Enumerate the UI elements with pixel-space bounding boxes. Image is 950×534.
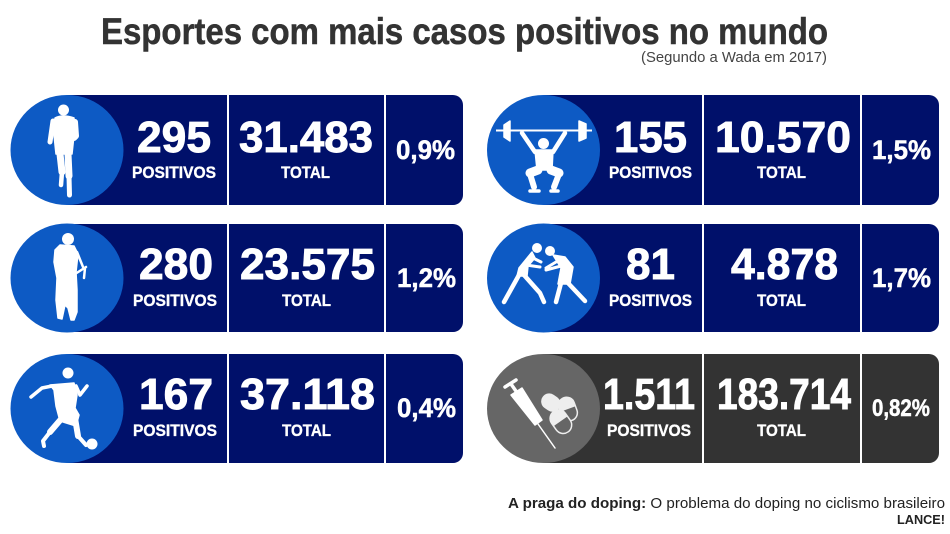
panel: wrestling: [487, 224, 939, 332]
label: positivos: POSITIVOS: [607, 422, 691, 440]
value: percent: 1,5%: [872, 135, 931, 165]
source credit: A praga do doping: O problema do doping no ciclismo brasileiro: [508, 495, 945, 512]
value: positivos: 167: [139, 370, 213, 419]
label: positivos: POSITIVOS: [133, 292, 217, 310]
icon: football player: [31, 368, 98, 450]
panel: cycling: [10, 224, 463, 332]
value: percent: 0,4%: [397, 393, 456, 423]
icon: weightlifter: [496, 121, 592, 191]
panel: football: [10, 354, 463, 463]
value: total: 10.570: [715, 113, 851, 162]
value: percent: 0,82%: [872, 395, 930, 422]
panel: weightlifting: [487, 95, 939, 205]
title: Esportes com mais casos positivos no mundo: [101, 11, 828, 52]
source credit: [508, 495, 945, 527]
value: total: 37.118: [240, 370, 375, 419]
source credit: LANCE!: [897, 512, 945, 527]
icon: wrestlers: [504, 243, 585, 302]
label: total: TOTAL: [757, 422, 806, 440]
value: percent: 1,7%: [872, 263, 931, 293]
subtitle: (Segundo a Wada em 2017): [641, 49, 827, 66]
panel: total doping: [487, 354, 939, 463]
label: positivos: POSITIVOS: [132, 164, 216, 182]
value: total: 23.575: [240, 240, 375, 289]
label: positivos: POSITIVOS: [609, 292, 692, 310]
label: total: TOTAL: [281, 164, 330, 182]
value: percent: 0,9%: [396, 135, 455, 165]
icon: syringe and pills: [505, 380, 580, 448]
value: total: 4.878: [731, 240, 838, 289]
value: total: 31.483: [239, 113, 373, 162]
label: total: TOTAL: [757, 292, 806, 310]
value: positivos: 155: [614, 113, 687, 162]
label: positivos: POSITIVOS: [133, 422, 217, 440]
icon: cyclist: [54, 233, 86, 320]
label: total: TOTAL: [282, 292, 331, 310]
value: positivos: 295: [137, 113, 211, 162]
value: positivos: 81: [626, 240, 675, 289]
label: total: TOTAL: [282, 422, 331, 440]
value: positivos: 280: [139, 240, 213, 289]
value: total: 183.714: [717, 370, 851, 419]
panel: athletics: [10, 95, 463, 205]
value: positivos: 1.511: [603, 370, 695, 419]
label: positivos: POSITIVOS: [609, 164, 692, 182]
label: total: TOTAL: [757, 164, 806, 182]
value: percent: 1,2%: [397, 263, 456, 293]
icon: runner: [50, 104, 76, 195]
